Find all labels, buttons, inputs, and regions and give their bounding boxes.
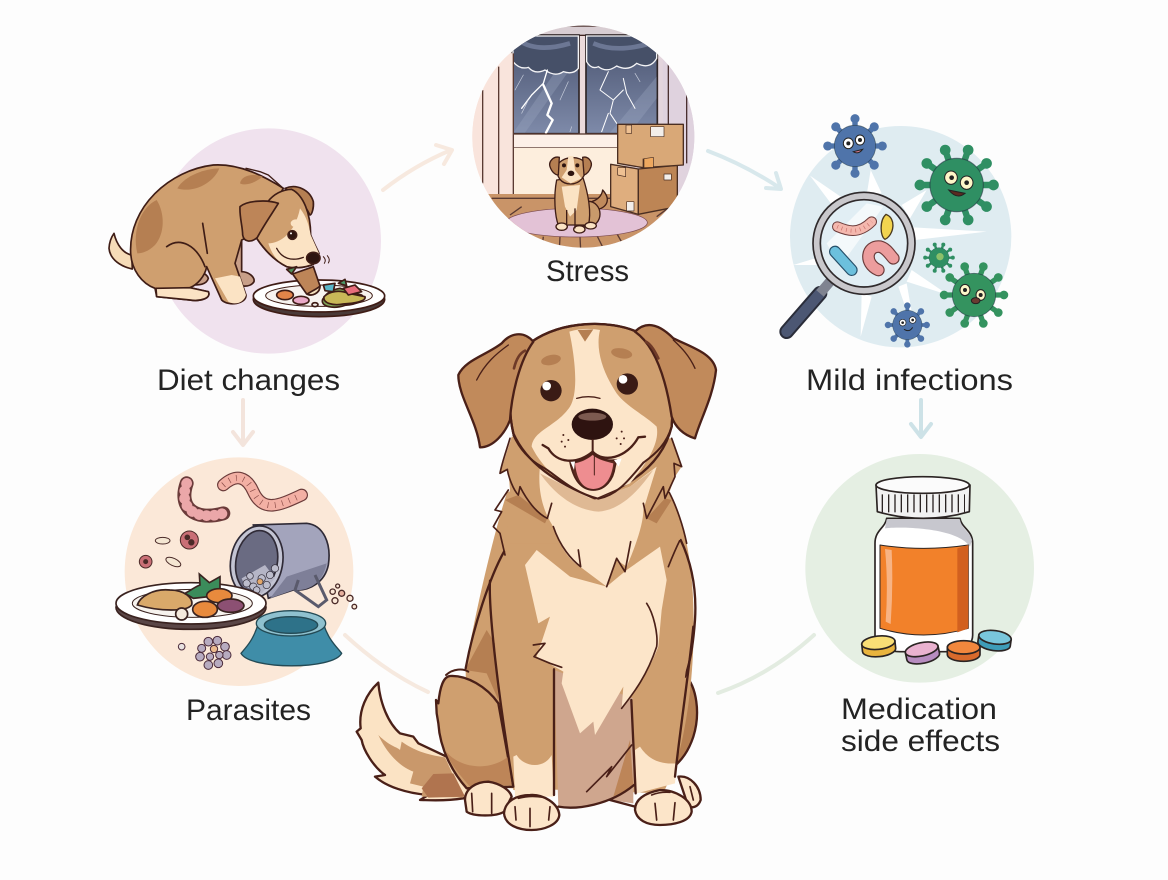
eyes [540,380,562,401]
icon: blue bowl [241,611,342,666]
room scene [470,23,697,254]
circle background [125,457,353,686]
near ear [240,201,278,241]
plate [253,279,385,317]
far ear [285,187,313,215]
icon: dog eating from plate [109,165,385,317]
mouth [570,453,617,490]
connector: medication to dog [718,635,814,693]
icon: magnifying glass [787,192,915,332]
arrow: diet changes to stress [383,145,452,190]
tail [357,683,477,800]
icon: orange pill bottle [875,477,973,652]
head [257,189,319,268]
tongue [575,455,613,489]
label: diet changes: Diet changes [157,364,340,397]
panel: parasites [116,457,357,686]
treat in mouth [293,267,320,295]
circle background [790,126,1011,347]
small dog [550,156,607,233]
icon: food plate [116,574,266,629]
body [436,492,701,830]
storm clouds [513,36,657,74]
virus: top blue [828,119,882,173]
label: mild infections: Mild infections [806,364,1013,397]
nose [572,409,613,440]
icon: tipped can [225,522,329,607]
label: medication side effects [841,693,1000,758]
paws [678,777,701,807]
panel: diet changes [109,128,385,354]
chest fur [525,547,667,735]
virus: tiny green [925,245,953,271]
window sill and wall [514,133,617,148]
lightning [515,70,640,133]
smile and chin [543,437,645,461]
head [458,324,716,499]
circle background [156,128,381,354]
panel: stress [470,23,697,254]
label: medication side effects: Medication [841,693,997,726]
label: parasites: Parasites [186,694,311,727]
arrow: diet changes to parasites [233,400,253,445]
spilled kibble [243,565,279,593]
neck fur [493,437,687,587]
parasite eggs [139,531,198,569]
fur strokes [533,540,680,792]
floor [488,194,678,248]
virus: large green [920,150,993,220]
arrow: mild infections to medication [911,400,931,437]
tail [109,233,132,269]
label: medication side effects: side effects [841,725,1000,758]
boxes [611,124,683,214]
belly [554,670,633,807]
virus: lower green [944,267,1004,323]
clustered eggs [178,636,231,669]
colored pills [861,628,1012,666]
worms [184,478,302,516]
panel: medication side effects [805,454,1034,683]
microbes [837,222,872,231]
brows [540,353,562,367]
label: stress: Stress [546,255,629,288]
circle background [805,454,1034,683]
connector: parasites to dog [345,635,428,692]
front legs [498,668,554,793]
curtains [512,53,513,149]
ears [458,334,533,447]
right haunch [663,675,697,767]
panel: mild infections [787,119,1011,347]
rug [506,208,647,237]
central happy dog [357,324,716,830]
window panes [512,35,657,134]
light rays [793,170,987,340]
left haunch [436,676,513,788]
arrow: stress to mild infections [708,151,781,189]
virus: small blue [888,306,927,344]
far legs [232,240,254,286]
body [131,165,283,304]
